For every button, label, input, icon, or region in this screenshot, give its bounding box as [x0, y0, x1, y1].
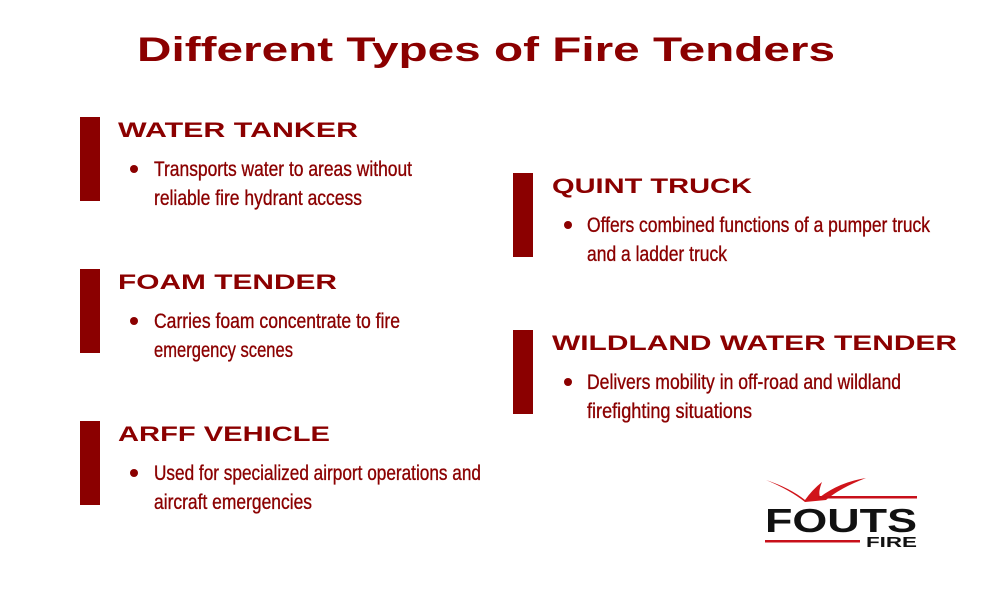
bullet text: wildland water tender: firefighting situations — [587, 400, 752, 423]
logo: fouts fire: FIRE — [866, 534, 917, 551]
heading: wildland water tender: WILDLAND WATER TENDER — [552, 332, 957, 355]
bullet text: arff vehicle: Used for specialized airport operations and — [154, 462, 481, 485]
bullet text: arff vehicle — [130, 462, 481, 514]
panel: foam tender — [80, 269, 400, 362]
heading: foam tender: FOAM TENDER — [118, 271, 337, 294]
bullet text: foam tender: Carries foam concentrate to fire — [154, 310, 400, 333]
bullet text: foam tender: emergency scenes — [154, 339, 293, 362]
bullet text: wildland water tender — [564, 371, 901, 423]
bullet text: water tanker: reliable fire hydrant access — [154, 187, 362, 210]
heading: quint truck: QUINT TRUCK — [552, 175, 752, 198]
bullet text: quint truck: Offers combined functions of a pumper truck — [587, 214, 930, 237]
panel: water tanker — [80, 117, 412, 210]
bullet text: quint truck: and a ladder truck — [587, 243, 727, 266]
panel: wildland water tender — [513, 330, 957, 423]
bullet text: arff vehicle: aircraft emergencies — [154, 491, 312, 514]
bullet text: quint truck — [564, 214, 930, 266]
panel: quint truck — [513, 173, 930, 266]
title: Different Types of Fire Tenders — [137, 31, 835, 69]
panel: arff vehicle — [80, 421, 481, 514]
logo: fouts fire: FOUTS — [765, 502, 917, 539]
heading: water tanker: WATER TANKER — [118, 119, 358, 142]
logo: fouts fire — [765, 478, 917, 551]
bullet text: foam tender — [130, 310, 400, 362]
bullet text: water tanker — [130, 158, 412, 210]
bullet text: wildland water tender: Delivers mobility in off-road and wildland — [587, 371, 901, 394]
heading: arff vehicle: ARFF VEHICLE — [118, 423, 330, 446]
bullet text: water tanker: Transports water to areas without — [154, 158, 412, 181]
